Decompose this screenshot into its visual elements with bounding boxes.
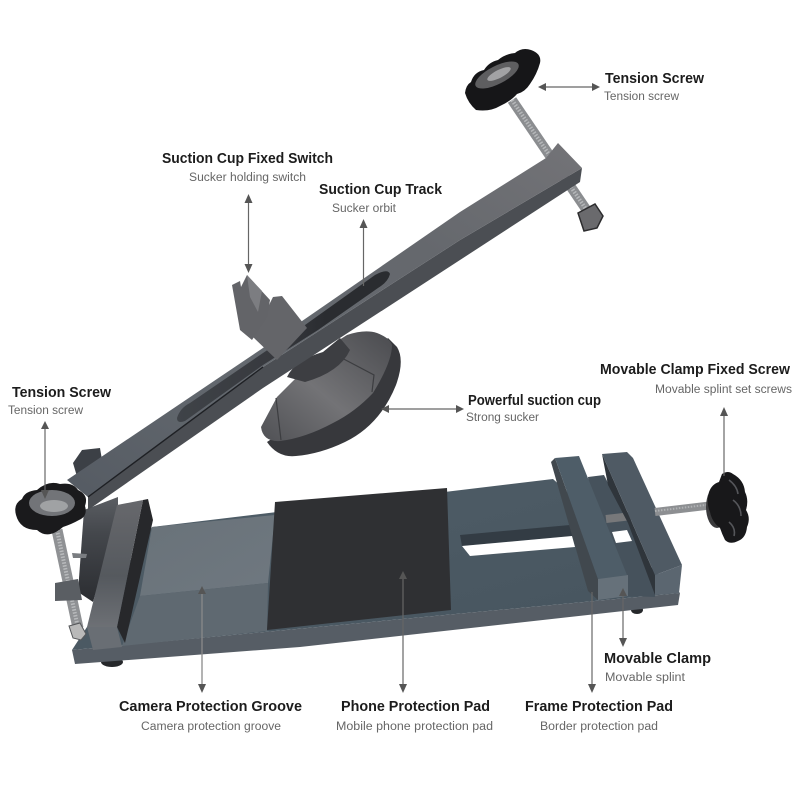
base plate top surface: [72, 479, 680, 650]
arrow: suction cup: [381, 405, 464, 413]
left nut: [69, 623, 86, 640]
arrow: top tension screw: [538, 83, 600, 91]
arm end line: [88, 367, 263, 497]
movable clamp: [551, 456, 628, 600]
camera protection groove: [122, 515, 275, 646]
label: powerful suction cup: [466, 393, 601, 424]
phone protection pad: [267, 488, 451, 630]
label: top tension screw: [604, 71, 705, 103]
label: movable clamp fixed screw: Movable splint set screws: [655, 384, 792, 396]
suction cup track slot: [177, 271, 390, 422]
label: frame protection pad: Border protection pad: [540, 721, 658, 733]
suction cup fixed switch: [232, 275, 307, 360]
label: powerful suction cup: Strong sucker: [466, 412, 539, 424]
label: left tension screw: [8, 385, 112, 417]
label: phone protection pad: Mobile phone protection pad: [336, 721, 493, 733]
arrow: phone protection pad: [399, 571, 407, 693]
label: powerful suction cup: Powerful suction cup: [468, 393, 601, 409]
arrow: frame protection pad: [588, 592, 596, 693]
slot in base plate: [460, 525, 575, 556]
arm side face: [88, 168, 582, 510]
label: suction cup fixed switch: Suction Cup Fixed Switch: [162, 151, 333, 167]
top nut: [578, 204, 603, 231]
label: camera protection groove: Camera protection groove: [141, 721, 281, 733]
lower screw block: [55, 579, 82, 601]
foot right: [631, 606, 643, 614]
clamp knob left: [15, 483, 86, 534]
left threaded screw: [57, 530, 78, 628]
label: left tension screw: Tension Screw: [12, 385, 112, 401]
suction cup: [261, 331, 401, 456]
arrow: track: [360, 219, 368, 286]
label: frame protection pad: Frame Protection Pad: [525, 699, 673, 715]
label: suction cup track: Suction Cup Track: [319, 182, 443, 198]
clamp knob top: [465, 49, 540, 110]
threaded screw right: [655, 504, 714, 512]
arm top face: [67, 143, 582, 497]
label: movable clamp fixed screw: Movable Clamp Fixed Screw: [600, 362, 791, 378]
label: suction cup fixed switch: [162, 151, 333, 184]
threaded screw inner segment: [606, 516, 632, 519]
arrow: left tension screw: [41, 421, 49, 499]
label: suction cup track: [319, 182, 443, 215]
foot left: [101, 657, 123, 667]
label: movable clamp: Movable splint: [605, 672, 686, 684]
label: phone protection pad: [336, 699, 493, 733]
label: suction cup fixed switch: Sucker holding switch: [189, 172, 306, 184]
device: phone screen separator fixture: [15, 49, 749, 667]
label: camera protection groove: [119, 699, 302, 733]
label: left tension screw: Tension screw: [8, 405, 84, 417]
label: movable clamp: Movable Clamp: [604, 651, 711, 667]
label: movable clamp: [604, 651, 711, 684]
label: camera protection groove: Camera Protection Groove: [119, 699, 302, 715]
label: movable clamp fixed screw: [600, 362, 792, 396]
arrow: fixed switch: [244, 194, 252, 273]
label: suction cup track: Sucker orbit: [332, 203, 397, 215]
rear arm block: [73, 448, 102, 480]
arrow: movable clamp: [619, 588, 627, 647]
label: phone protection pad: Phone Protection Pad: [341, 699, 490, 715]
left support column: [78, 497, 118, 602]
arrow: movable clamp fixed screw: [720, 407, 728, 476]
arrow: camera protection groove: [198, 586, 206, 693]
base plate front edge: [72, 593, 680, 664]
label: top tension screw: Tension Screw: [605, 71, 705, 87]
clamp knob right: [706, 472, 749, 543]
fixed rear clamp: [602, 452, 682, 595]
left end clamp: [87, 499, 153, 650]
label: top tension screw: Tension screw: [604, 91, 680, 103]
white window in channel: [612, 530, 632, 543]
channel between clamps: [588, 475, 655, 597]
upper screw plate: [72, 553, 87, 558]
top screw: [512, 100, 592, 218]
label: frame protection pad: [525, 699, 673, 733]
